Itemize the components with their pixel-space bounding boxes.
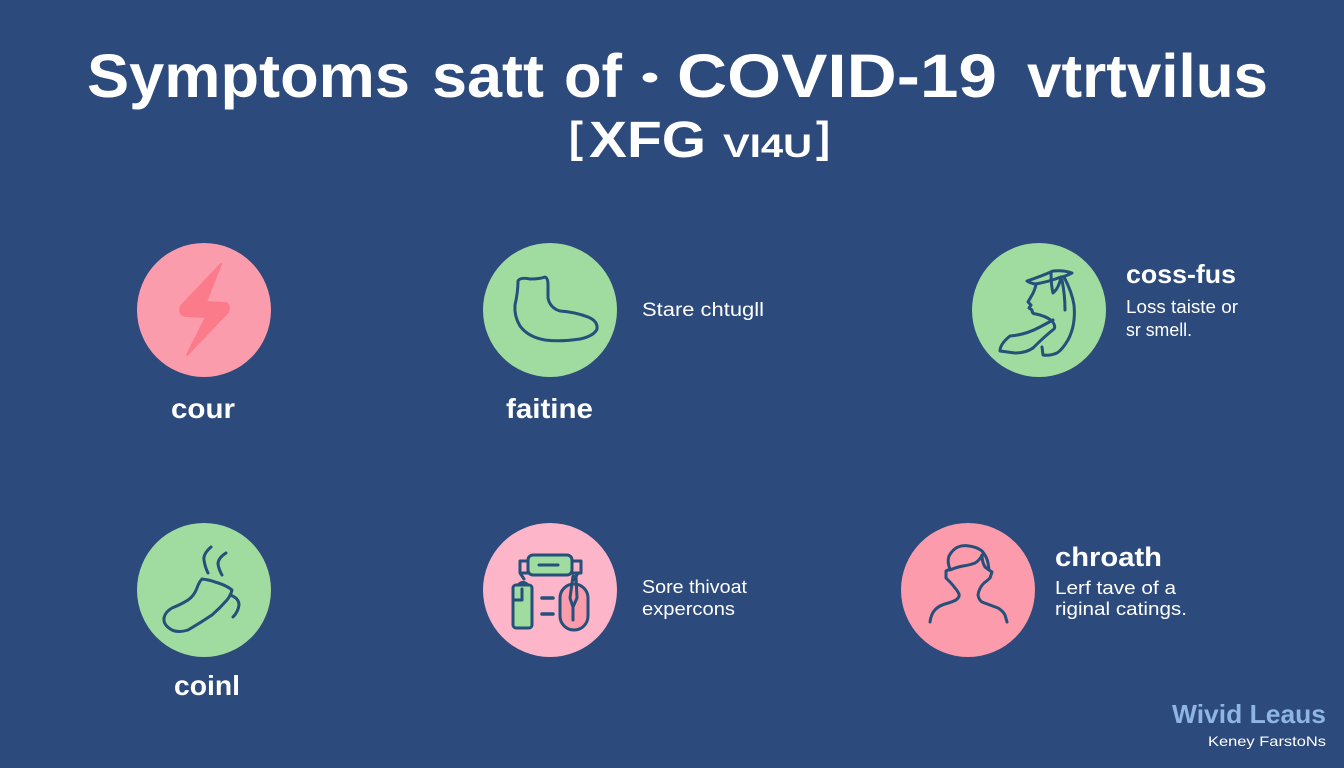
title: of — [564, 42, 623, 110]
subtitle: VI4U — [723, 128, 812, 164]
symptom: cour — [137, 243, 271, 424]
icon: foot outline — [483, 243, 617, 377]
description: Sore thivoat expercons: expercons — [642, 598, 735, 619]
heading: chroath: chroath — [1055, 542, 1162, 572]
label: cour: cour — [171, 393, 235, 424]
heading: coss-fus: coss-fus — [1126, 259, 1236, 289]
footer brand — [1172, 699, 1326, 749]
icon: medicine kit — [483, 523, 617, 657]
footer brand: Keney FarstoNs — [1208, 733, 1326, 749]
label: faitine: faitine — [506, 393, 593, 424]
icon: head profile — [972, 243, 1106, 377]
description: loss of taste or smell: sr smell. — [1126, 320, 1192, 340]
description: Sore thivoat expercons — [642, 576, 747, 619]
symptom: coss-fus — [972, 243, 1238, 377]
title — [87, 42, 1268, 110]
symptom: coinl — [137, 523, 271, 701]
description: Lerf tave of a riginal catings: riginal catings. — [1055, 598, 1187, 619]
subtitle: XFG — [589, 111, 706, 168]
symptom: sore throat — [483, 523, 747, 657]
icon: person bust — [901, 523, 1035, 657]
title: COVID-19 — [677, 42, 997, 110]
subtitle: [ — [569, 113, 583, 162]
description: loss of taste or smell: Loss taiste or — [1126, 297, 1238, 317]
footer brand: Wivid Leaus — [1172, 699, 1326, 729]
icon: sock with steam — [137, 523, 271, 657]
label: coinl: coinl — [174, 670, 240, 701]
subtitle: ] — [816, 113, 830, 162]
title: satt — [432, 42, 544, 110]
description: Sore thivoat expercons: Sore thivoat — [642, 576, 747, 597]
subtitle — [569, 111, 830, 168]
description: Lerf tave of a riginal catings — [1055, 577, 1187, 619]
symptom: faitine — [483, 243, 764, 424]
title: vtrtvilus — [1027, 42, 1268, 110]
description: Stare chtugll: Stare chtugll — [642, 300, 764, 321]
description: loss of taste or smell — [1126, 297, 1238, 340]
title: Symptoms — [87, 42, 410, 110]
icon: lightning bolt — [137, 243, 271, 377]
title: • — [641, 59, 659, 97]
description: Lerf tave of a riginal catings: Lerf tave of a — [1055, 577, 1177, 598]
symptom: chroath — [901, 523, 1187, 657]
